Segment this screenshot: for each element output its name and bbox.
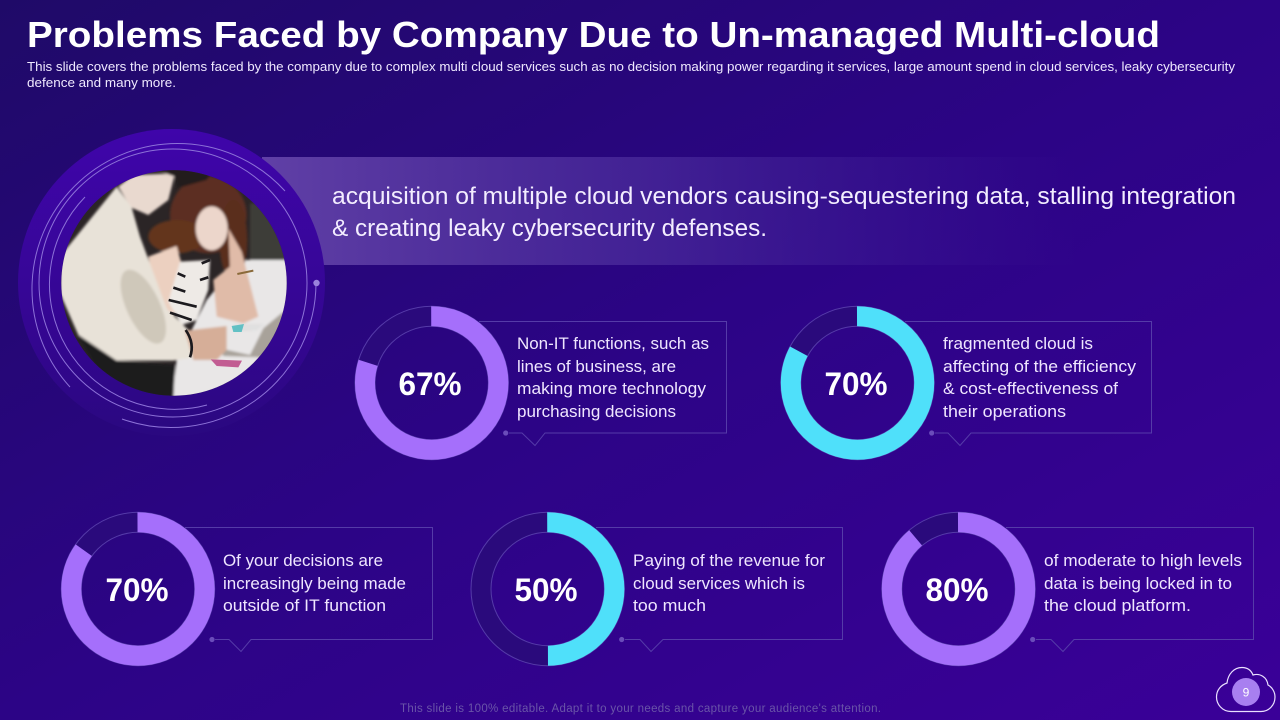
callout fragmented cloud [905,322,1152,446]
callout fragmented cloud: & cost-effectiveness of [943,379,1118,398]
title: Problems Faced by Company Due to Un-managed Multi-cloud [27,14,1160,55]
photo: two colleagues at a desk [57,167,290,400]
value 70%: 70% [106,572,168,608]
callout revenue [596,528,842,652]
callout decisions: outside of IT function [223,596,386,615]
value 70%: 70% [824,366,888,402]
callout fragmented cloud: fragmented cloud is [943,334,1093,353]
donut 50% [471,512,624,666]
callout fragmented cloud: affecting of the efficiency [943,357,1137,376]
footer note: This slide is 100% editable. Adapt it to your needs and capture your audience's attention. [400,703,881,715]
stat: 70% decisions [61,512,433,666]
page number cloud icon: 9 [1243,686,1250,700]
callout decisions: Of your decisions are [223,551,383,570]
donut 80% [882,512,1035,666]
value 80%: 80% [926,572,988,608]
callout revenue: too much [633,596,706,615]
page number cloud icon [1216,668,1275,712]
photo medallion [18,129,325,436]
subtitle [27,59,1236,90]
callout 67%: purchasing decisions [517,402,676,421]
value 50%: 50% [514,572,578,608]
donut 70% cyan [781,306,934,460]
callout decisions: increasingly being made [223,574,406,593]
value 67%: 67% [398,366,462,402]
callout 67%: Non-IT functions, such as [517,334,709,353]
callout cloud platform: of moderate to high levels [1044,551,1242,570]
stat: 50% [471,512,842,666]
callout 67% [479,322,726,446]
callout cloud platform [1006,528,1254,652]
callout fragmented cloud: their operations [943,402,1066,421]
callout decisions [185,528,432,652]
banner: & creating leaky cybersecurity defenses. [332,215,767,242]
callout 67%: lines of business, are [517,357,676,376]
stat: 67% [355,306,726,460]
callout cloud platform: data is being locked in to [1044,574,1232,593]
subtitle: defence and many more. [27,75,176,90]
callout cloud platform: the cloud platform. [1044,596,1191,615]
donut 67% [355,306,508,460]
banner: acquisition of multiple cloud vendors causing-sequestering data, stalling integration [332,183,1236,210]
callout 67%: making more technology [517,379,706,398]
donut 70% purple [61,512,215,666]
callout revenue: cloud services which is [633,574,805,593]
stat: 70% fragmented cloud [781,306,1152,460]
stat: 80% [882,512,1254,666]
banner [262,157,1280,265]
callout revenue: Paying of the revenue for [633,551,825,570]
subtitle: This slide covers the problems faced by the company due to complex multi cloud services such as no decision making power regarding it services, large amount spend in cloud services, leaky cybersecurity [27,59,1236,74]
